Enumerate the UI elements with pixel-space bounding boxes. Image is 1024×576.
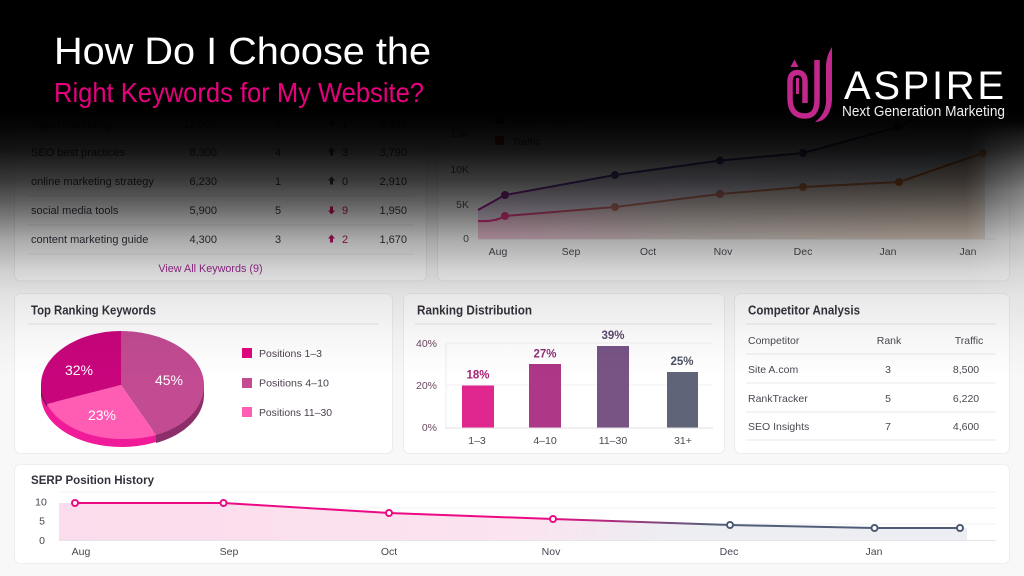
y axis labels: 0 [463,233,469,245]
pie legend: Positions 4–10 [259,378,329,390]
table rows: 3,790 [379,147,407,159]
competitor table: 4,600 [953,421,979,433]
table rows [31,119,407,246]
table rows: 1 [275,176,281,188]
x axis labels: Nov [714,246,733,258]
x axis labels [489,246,977,258]
panel: top ranking keywords [14,294,392,454]
x axis labels: Jan [880,246,897,258]
competitor table [748,335,983,433]
x axis labels: Dec [720,546,738,558]
x axis labels: 4–10 [533,435,557,447]
pie labels: 45% [155,372,183,388]
competitor table: 8,500 [953,364,979,376]
y axis labels: 20% [416,380,437,392]
panel: ranking distribution [404,294,724,454]
competitor table: 6,220 [953,393,979,405]
table rows: SEO best practices [31,147,126,159]
bars [462,346,698,428]
y axis labels: 0% [422,422,437,434]
x axis labels: Sep [562,246,580,258]
link: view all keywords: View All Keywords (9) [158,263,263,275]
competitor table: Traffic [955,335,983,347]
pie legend: Positions 11–30 [259,407,332,419]
icons: change arrows [328,119,335,242]
pie chart [41,331,204,447]
competitor table: Site A.com [748,364,798,376]
table rows: 5 [275,205,281,217]
traffic area [478,153,983,239]
x axis labels: Jan [866,546,883,558]
right edge light falloff [974,128,1024,271]
competitor table: 5 [885,393,891,405]
competitor table: Competitor [748,335,800,347]
icon: paperclip mark [790,47,832,122]
table rows: 4 [275,147,281,159]
table rows: digital marketing [31,119,111,131]
table rows: 1,950 [379,205,407,217]
table rows: 0 [342,176,348,188]
title [54,31,431,108]
y axis labels: 10 [35,496,47,508]
table rows: 8,300 [189,147,217,159]
y axis labels: 10K [450,164,469,176]
y axis labels [450,128,469,245]
y axis labels: 15K [450,128,469,140]
x axis labels: 31+ [674,435,692,447]
table rows: 5,320 [379,119,407,131]
search volume area [478,85,985,239]
x axis labels: Aug [489,246,507,258]
position area [59,503,967,540]
pie legend: Positions 1–3 [259,348,322,360]
y axis labels [35,496,47,547]
table rows: social media tools [31,205,119,217]
bar value labels: 18% [466,370,490,382]
chart legend [495,114,583,148]
competitor table: SEO Insights [748,421,809,433]
tagline: Next Generation Marketing [842,104,1005,120]
y axis labels [416,338,437,434]
x axis labels [72,546,883,558]
y axis labels: 5 [39,516,45,528]
pie labels: 23% [88,407,116,423]
competitor table: 3 [885,364,891,376]
panel: keyword table [14,90,426,281]
table rows: 3 [342,147,348,159]
table rows: 2 [342,234,348,246]
competitor table: RankTracker [748,393,808,405]
x axis labels: Oct [381,546,397,558]
pie labels [65,362,183,423]
bar value labels [466,330,694,382]
x axis labels: Nov [542,546,561,558]
position line [72,500,963,531]
x axis labels: Jan [960,246,977,258]
x axis labels: Sep [220,546,238,558]
y axis labels: 5K [456,199,469,211]
chart legend: Search Volume [512,114,583,126]
x axis labels: Oct [640,246,656,258]
title: How Do I Choose the [54,31,431,73]
logo: Aspire [790,47,1005,122]
pie labels: 32% [65,362,93,378]
search volume line [478,85,985,210]
competitor table: Rank [877,335,902,347]
panel: SERP position history [14,464,1010,564]
table rows: 9 [342,205,348,217]
table rows: 5,900 [189,205,217,217]
subtitle: Right Keywords for My Website? [54,77,424,108]
wordmark: ASPIRE [844,64,1004,108]
table rows: 1,670 [379,234,407,246]
x axis labels: Dec [794,246,812,258]
bar value labels: 27% [533,348,557,360]
traffic line [478,149,987,221]
competitor table: 7 [885,421,891,433]
y axis labels: 40% [416,338,437,350]
table rows: content marketing guide [31,234,148,246]
pie legend [242,348,332,419]
x axis labels: 1–3 [468,435,486,447]
table rows: 1 [342,119,348,131]
table rows: 2,910 [379,176,407,188]
table rows: 2 [275,119,281,131]
table rows: 6,230 [189,176,217,188]
heading: SERP Position History [31,473,154,487]
x axis labels: 11–30 [599,435,627,447]
y axis labels: 0 [39,535,45,547]
bar value labels: 25% [670,356,694,368]
panel: traffic line chart [438,85,1010,281]
x axis labels: Aug [72,546,90,558]
table rows: 4,300 [189,234,217,246]
chart legend: Traffic [512,136,541,148]
x axis labels [468,435,692,447]
heading: Top Ranking Keywords [31,304,156,318]
bar value labels: 39% [601,330,625,342]
panel: competitor analysis [734,294,1010,454]
table rows: online marketing strategy [31,176,154,188]
heading: Ranking Distribution [417,304,532,318]
table rows: 3 [275,234,281,246]
heading: Competitor Analysis [748,304,860,318]
table rows: 12,000 [183,119,217,131]
